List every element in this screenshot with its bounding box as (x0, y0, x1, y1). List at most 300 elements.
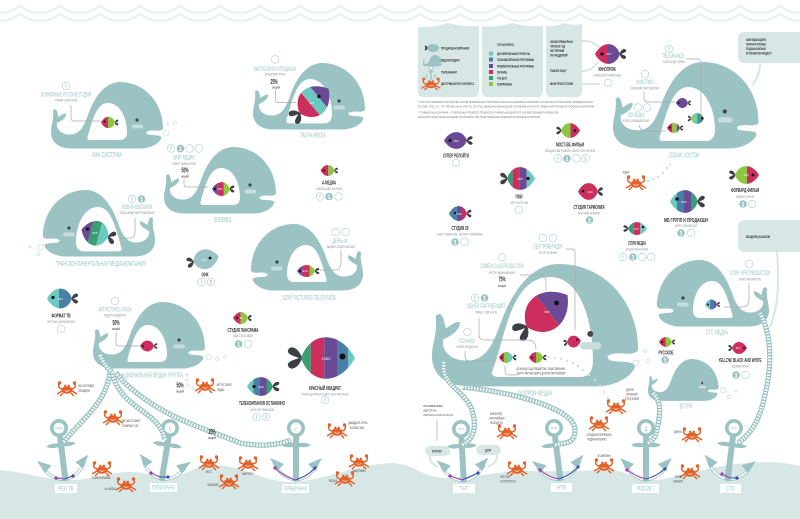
label: Art Pictures Vision: 50% (112, 320, 120, 327)
label: Новая компания (120, 205, 155, 215)
anchor: Первый канал (270, 421, 322, 493)
fish: Гармония (578, 183, 603, 200)
label: Супер Релоити: СУПЕР РЕЛОЙТИ (443, 152, 469, 160)
whale: АФК Система (51, 82, 163, 148)
dotted trail: Zodiak to crab (647, 163, 671, 182)
label: Comedy Club Production: АРТУР ДЖАНИБЕКЯН (489, 270, 515, 275)
fish: Газпром large (512, 292, 568, 341)
fish: Форвард-Фильм (729, 166, 759, 184)
label: МБ Групп: МАРГО ХРАМОВСКАЯ (675, 223, 697, 228)
rope: НМГ to Пен ТВ (63, 372, 110, 443)
label: Студия 29: ОЛЕГ ИВАНОВ, НЕЛЛИ КЛЕЙМАН (437, 232, 483, 236)
panel: fish metrics legend: ЧАСОВ В ГОД (550, 44, 565, 48)
fish: Красный квадрат (288, 337, 355, 379)
crab captions, right page: ДЖЕРОЧ (674, 430, 682, 434)
fish: Панорама (233, 312, 252, 324)
label: Студия 29 (437, 226, 483, 236)
anchor: НТВ: НТВ (557, 486, 566, 492)
fish: ОНК (186, 249, 218, 270)
callout connector (752, 63, 760, 85)
label: Формат ТВ: СВЕТЛАНА ШАРИКОВСКАЯ (47, 319, 75, 324)
label: Центр Партнершип: ПАВЕЛ СТЕПАНОВ (475, 310, 497, 314)
crab captions, right page: ВОРТАНЕРСКИЙ (626, 392, 638, 396)
source note (423, 404, 454, 417)
label: Story First Production: ВЯЧЕСЛАВ МУРУГОВ (739, 276, 761, 282)
label: Yellow, Black and White: ЭДУАРД ИЛОЯН (732, 364, 749, 368)
label: Tellurance (662, 54, 685, 64)
label: ПКИ (510, 194, 528, 205)
label: FTO Нанко: ЮРИЙ СЕРДЮКОВ (456, 344, 478, 349)
label: Вайт Медиа: ТИМУР ВАЙНШТЕЙН (172, 161, 196, 166)
label: Возможные русские студии (41, 92, 91, 102)
label: Мир реалити (254, 67, 296, 90)
stake labels and crab captions, left page: 25% (208, 429, 216, 436)
fish: МБ Групп (670, 190, 705, 213)
fish: Студия 29 (449, 206, 471, 221)
small circular badges (57, 45, 756, 421)
label: Мир реалити: 25% (270, 79, 278, 86)
crab captions, right page: ТОЛЕ (674, 475, 682, 479)
legend type labels: ТОК-ШОУ (497, 76, 507, 80)
badge numerals: 1 (140, 198, 144, 204)
legend labels: ДИСТРИБЬЮТОР КОНТЕНТА (441, 82, 474, 86)
footnotes: ИНАЯ ДОЛЯ ТАКЖЕ МЕЖДУНАРОДНЫЕ ИНСТРУМЕНТЫ ИЛИ ПРЕДСТАВЛЕННЫЕ ПРОДЮСЕРОМ ПРОДАКШН-КОМПАНИИ (418, 115, 540, 119)
fish: ОНК: 140 (201, 258, 207, 262)
whale: Национальная Медиа Группа (93, 302, 205, 368)
rope: ВГТРК to Россия 1 (648, 393, 660, 443)
label: Студия Панорама (228, 328, 259, 338)
badge numerals: 5 (265, 415, 268, 421)
badge numerals: 1 (565, 157, 569, 163)
badge numerals: f (256, 415, 258, 421)
label: Красный квадрат (302, 384, 349, 396)
label: МБ Групп: МБ ГРУПП И ПРОДАКШН (664, 218, 708, 224)
fish: Супер Релоити: 280 (453, 139, 459, 143)
crab captions, right page: ЗОДИАК (622, 170, 630, 174)
callout: question box: ПРОДАКШН-КОМПАНИИ, (746, 47, 766, 51)
rope: НМГ to Пятый канал (112, 372, 165, 440)
badge numerals: 1 (631, 256, 635, 262)
fish: Газпром large: 860 (544, 310, 550, 314)
fish: Sony (297, 265, 319, 277)
crab captions, right page: НЕТУОРКСОН (500, 480, 516, 484)
anchor: Пятый канал: ПЯТЫЙ КАНАЛ (152, 484, 175, 492)
fish: Story First (705, 300, 720, 310)
label: Центр Партнершип (467, 304, 505, 314)
label: Zodiak Vostok: ZODIAK VOSTOK (668, 152, 700, 160)
label: Art Pictures Vision: ART PICTURES VISION (98, 308, 132, 314)
label: День-М (327, 239, 355, 249)
stake labels and crab captions, left page: ART PICTURES (216, 383, 232, 387)
badge numerals: 1 (483, 296, 487, 302)
label: Формат ТВ (47, 314, 75, 324)
stake labels and crab captions, left page: ФЕСТ (206, 470, 212, 474)
label: Стори Медиа (626, 241, 648, 252)
callout: channel owner (738, 220, 800, 252)
pill: доля: ДОЛЯ (485, 448, 491, 452)
label: Story First Production (730, 271, 770, 282)
anchor: Пятый канал (136, 417, 197, 492)
stake labels and crab captions, left page: МЕДИА (218, 388, 225, 392)
badge numerals: f (474, 296, 476, 302)
fish: Zodiak purple (676, 98, 691, 108)
badge numerals: 1 (679, 232, 683, 238)
anchor: Россия 1 (620, 421, 672, 493)
anchor: СТС (702, 418, 761, 493)
stake labels and crab captions, left page: ЗАЩИТНИКИ (352, 469, 366, 473)
label: Вайт Медиа (172, 154, 196, 178)
legend type labels (497, 52, 534, 86)
fish: Кинопром: 297 (606, 52, 612, 56)
pill: доля (476, 445, 501, 455)
icon: anchor (425, 66, 437, 80)
label: Годот премьер-медиа: АРТУР ЗЕЛЕНИН (539, 250, 557, 255)
text: СТОРИ МЕДИА (628, 241, 646, 247)
label: Красный квадрат: КРАСНЫЙ КВАДРАТ (309, 384, 341, 392)
fish: Центр Партнершип (529, 352, 546, 363)
bubbles (29, 121, 737, 399)
crab captions, right page: ХОЛОДОМ ИНТЕРНЕЙШНЛ (586, 433, 612, 437)
label: А-Медиа: АЛЕКСАНДР АКОПОВ (316, 186, 342, 191)
crab captions, right page: МЕДИА НЕТВОРКС (588, 438, 607, 442)
badge numerals: 1 (588, 218, 592, 224)
rope: НМГ tail knot (100, 355, 112, 372)
fish: Останкино: 390 (258, 385, 264, 389)
icon: media holding (423, 55, 442, 66)
legend type labels: СЕРИАЛЫ (497, 70, 507, 74)
label: Стори Медиа: ВЛАДИСЛАВ РЫЖОВ (626, 246, 648, 252)
stake labels and crab captions, left page: ДВАДЦАТЬ ПЯТЬ (348, 421, 368, 425)
label: Мистфо: МИСТФО (636, 80, 654, 86)
label: День-М: ВАДИМ СОКОЛОВСКИЙ (327, 244, 355, 249)
icon: crab distributor (422, 77, 440, 90)
fish: Студия 29: 190 (456, 212, 462, 216)
crab captions, right page: (ГРУЗ) НОВОЕ (625, 397, 639, 401)
panel: fish metrics legend (546, 23, 582, 97)
dotted trail: Газпром to crab (548, 356, 609, 399)
label: ПКИ: ОЛЕГ КАПУСТИН (510, 200, 528, 205)
fish: А-Медиа (320, 165, 338, 176)
label: note inside Газпром whale: ЦЕНТР ПАРТНЕРШИП И ДОЛГИЕ ПЕРТНЕРШИП (516, 372, 566, 376)
stake labels and crab captions, left page: PLANETA RUSSIA (92, 476, 111, 480)
label: Мистфо (631, 80, 659, 90)
stake labels and crab captions, left page: акций (176, 390, 184, 394)
footnotes: ** ГЛАВНЫЕ ЛИЦА КОМПАНИИ — ГЕНЕРАЛЬНЫЙ ПРОДЮСЕР, ПРОДЮСЕР И ГЕНЕРАЛЬНЫЙ ДИРЕКТОР, ХУДОЖЕСТВЕННЫЙ РУКОВОДИТЕЛЬ (418, 110, 559, 114)
label: Art Pictures Vision (98, 308, 132, 331)
label: Art Pictures Vision: акций (112, 327, 120, 331)
label: ВГТРК: ВГТРК (680, 404, 693, 410)
callout: question box (738, 32, 800, 63)
anchor: Пен ТВ (32, 418, 91, 493)
fish: МБ Групп: 540 (681, 200, 687, 204)
whale: СТС Медиа (657, 260, 769, 326)
anchor: ТНТ: ТНТ (460, 486, 469, 492)
label: Зох Медиа: ЗОХ МЕДИА (628, 113, 644, 119)
label: А-Медиа (316, 180, 342, 191)
footnotes: * ПРИ СОСТАВЛЕНИИ КОЛИЧЕСТВО ЧАСОВ ПРЕМЬЕРНЫХ ПРОГРАММ СОГЛАСНО ДАННЫМ КОМПАНИЙ И ОТКРЫТЫХ ИСТОЧНИКОВ, ПЕРВЫЕ КАНАЛЫ (418, 100, 594, 104)
anchor: НТВ: НТВ (551, 426, 558, 430)
footnotes: РОССИИ, НТВ, СТС, ТНТ, ПЯТЫЙ КАНАЛ, РЕН ТВ, 2014 ГОД. МЕЖДУНАРОДНЫЕ ДОЛИ ОСТАНОВКИ КОНТЕНТА, МЕДИА КОРПОРАЦИИ И ПРОДАКШН-КОМПАНИИ (418, 104, 594, 108)
label: Возможные русские студии: ВОЗМОЖНЫЕ РУССКИЕ СТУДИИ (41, 92, 91, 98)
fish: Стори Медиа: 170 (633, 227, 639, 231)
label: Форвард-Фильм: ФОРВАРД-ФИЛЬМ (731, 188, 759, 194)
badge numerals: f (324, 398, 326, 404)
badge numerals: 5 (210, 280, 213, 286)
anchor: СТС: СТС (731, 426, 738, 430)
anchor: СТС: СТС (726, 486, 735, 492)
whale: ВГТРК (648, 359, 719, 401)
label: Вайт Медиа: акций (181, 174, 189, 178)
badge numerals: 5 (584, 156, 587, 162)
crab captions, right page: ТВ БОДУЭН (490, 421, 503, 425)
fish: Zodiak red (667, 123, 683, 133)
legend swatches (489, 52, 493, 86)
fish: Talpa: 671 (309, 101, 315, 105)
fish: Панорама: 75 (239, 316, 243, 320)
panel: content types legend (482, 23, 543, 97)
label: МБ Групп (664, 218, 708, 228)
text: ГОДОТ ПРЕМЬЕР-МЕДИА (534, 244, 562, 250)
label: Comedy Club Production (480, 264, 524, 288)
label: Русское: РУССКОЕ (658, 350, 674, 356)
footnotes (418, 100, 594, 119)
label: Мир реалити: ВЛАДИМИР ФТИН (265, 72, 285, 76)
label: Art Pictures Vision: ФЕДОР БОНДАРЧУК (104, 312, 126, 318)
fish: АФК (101, 117, 118, 128)
stake labels and crab captions, left page: ВАРЯГО (242, 472, 254, 476)
label: Студия Гармония: ВЕРОНИКА ЗЕЛЕНАЯ (578, 210, 600, 216)
callout: question box: КОТОРЫМИ ОН ВЛАДЕЕТ? (746, 52, 772, 56)
fish: Красный квадрат: 1050 (322, 356, 331, 361)
fish: ФТО Нанко (496, 350, 516, 364)
label: Зох Медиа (623, 113, 649, 123)
legend type labels: ДОКУМЕНТАЛЬНЫЕ ПРОЕКТЫ (497, 52, 530, 56)
panel: fish metrics legend: ОБЪЕМ ПРЕМЬЕРНЫХ (550, 40, 573, 44)
panel: legend companies (418, 23, 479, 97)
label: ТМК: ТРАНСКОНТИНЕНТАЛЬНАЯ МЕДИАКОМПАНИЯ (56, 261, 146, 268)
callout: question box: ПУБЛИЧНО РАСПОЛОЖЕНЫ (746, 42, 766, 46)
badge numerals: f (131, 197, 133, 203)
fish: Yellow, Black and White (728, 342, 747, 354)
label: Зох Медиа: ЕЛЕНА ЛЮБАШЕВСКАЯ (623, 118, 649, 123)
label: Национальная Медиа Группа: НАЦИОНАЛЬНАЯ МЕДИА ГРУППА (119, 372, 183, 380)
badge numerals: f (668, 47, 670, 53)
label: Talpa Media: TALPA MEDIA (300, 132, 326, 140)
stake labels and crab captions, left page (78, 382, 368, 491)
label: Comedy Club Production: COMEDY CLUB PRODUCTION (480, 264, 524, 270)
label: Кинопром: КИНОПРОМ (598, 67, 616, 73)
label: СТС Медиа: СТС МЕДИА (706, 330, 728, 336)
panel: fish metrics legend: ЭКСТЕРНИВ (550, 49, 564, 53)
crab captions, right page (490, 170, 683, 484)
label: Студия 29: СТУДИЯ 29 (452, 226, 468, 232)
label: note inside Газпром whale: ДО КОНЦА ГОДА ПРЕДМЕТОМ, ОБЩЕСТВЕННЫМ, (516, 367, 566, 371)
pill connectors (430, 455, 497, 467)
label: Вайт Медиа: 50% (182, 168, 189, 174)
text: МИР РЕАЛИТИ И ПРОДАКШН (254, 67, 296, 73)
panel: fish metrics legend: ГЛАВНОЕ ЛИЦО** (550, 69, 567, 73)
badge numerals: f (319, 194, 321, 200)
rope: НМГ to Первый канал (115, 372, 291, 445)
fish: Yellow, Black and White: 110 (736, 346, 741, 350)
badge numerals: 1 (741, 202, 745, 208)
fish: Endemol: 452 (217, 187, 223, 191)
label: Кинопром (593, 67, 621, 78)
label: Новая компания: НОВАЯ КОМПАНИЯ (122, 205, 152, 211)
fish: Sony: 340 (302, 269, 308, 273)
legend type labels: РАЗВЛЕКАТЕЛЬНЫЕ ПРОГРАММЫ (497, 64, 534, 68)
badge numerals: f (557, 156, 559, 162)
label: Вайт Медиа: ВАЙТ МЕДИА (174, 154, 194, 162)
label: Газпром-Медиа: ГАЗПРОМ-МЕДИА (518, 390, 552, 398)
anchor: Пен ТВ: РЕН ТВ (58, 486, 74, 492)
legend connector lines (582, 41, 600, 84)
anchor: Россия 1: РОССИЯ 1 (637, 486, 654, 492)
fish: Супер Релоити (444, 132, 473, 149)
label: ПКИ: ПКИ (516, 194, 523, 200)
label: Студия Панорама: СТУДИЯ ПАНОРАМА (228, 328, 259, 334)
crab captions, right page: ПОРТ ВЛК (500, 475, 510, 479)
label: FTO Нанко (456, 339, 478, 349)
label: Форвард-Фильм: АНДРЕЙ ЧЕРНЯК (736, 194, 754, 199)
stake labels and crab captions, left page: ТЕЛЕВИДЕНИЕ (78, 389, 90, 393)
label: День-М: ДЕНЬ-М (332, 239, 348, 245)
label: Годот премьер-медиа (534, 244, 562, 255)
legend labels (441, 46, 474, 86)
sea floor wave (0, 462, 800, 519)
label: Студия Гармония (574, 205, 605, 216)
source note: ПЕРИОД 01.01.2013-31.12.2013 (423, 413, 454, 417)
badge numerals: 1 (734, 374, 738, 380)
label: Comedy Club Production: акций (498, 284, 506, 288)
whale: Endemol (164, 147, 276, 214)
badge numerals: 1 (179, 147, 183, 153)
label: Endemol: ENDEMOL (214, 217, 232, 224)
badge numerals: f (170, 146, 172, 152)
fish: Русское (659, 337, 675, 347)
stake labels and crab captions, left page: акций (208, 436, 216, 440)
anchor: ТНТ: ТНТ (458, 428, 464, 432)
label: Comedy Club Production: 75% (498, 276, 506, 284)
label: Yellow, Black and White (718, 358, 762, 368)
fish: ПКИ: 400 (517, 177, 523, 181)
label: Новая компания: АЛЕКСАНДР МИТРОШЕНКОВ (120, 210, 155, 215)
label: Мост-Ве-Фильм: МОСТ-ВЕ-ФИЛЬМ (556, 142, 584, 148)
badge numerals: 1 (237, 342, 241, 348)
callout: question box: КАКИЕ МЕДИАХОЛДИНГИ (746, 38, 766, 42)
legend type labels: ПОЗНАВАТЕЛЬНЫЕ ПРОГРАММЫ (497, 58, 534, 62)
fish: Гармония: 120 (587, 190, 593, 194)
label: Останкино (239, 401, 285, 412)
label: Мост-Ве-Фильм: ВЛАДИСЛАВ РЫЖОВ, ВАЛЕНТИН ОРЛОВ (545, 148, 595, 153)
fish: НМГ (140, 340, 157, 352)
stake labels and crab captions, left page: 50% (176, 382, 184, 390)
label: Yellow, Black and White: YELLOW, BLACK AND WHITE (718, 358, 762, 364)
label: Кинопром: АЛЕКСЕЙ ПИМЕНОВ (593, 72, 621, 78)
label: Мистфо: ВИТАЛИЙ ПЕРСОВСКИЙ (631, 86, 659, 90)
crab captions, right page: В СИМФОНИ (598, 454, 611, 458)
label: Tellurance: TELLURANCE (662, 54, 684, 60)
fish: Газпром small red (563, 336, 581, 348)
fish: Форвард-Фильм: 230 (743, 173, 749, 177)
label: ОНК: ОНК (202, 272, 209, 278)
fish: Формат ТВ (47, 288, 78, 308)
whale: Talpa Media (253, 63, 365, 130)
panel: content types legend: ТИП КОНТЕНТА (497, 43, 514, 47)
label: Красный квадрат: РОМАН ДОРФМАН И ОЛЕГ КОНСТАНТИНОВ (302, 392, 349, 396)
pill: рейтинг: РЕЙТИНГ (432, 450, 442, 454)
crab captions, right page: ИНТЕРНЕЙШНЛ (490, 416, 504, 420)
legend type labels: ТЕЛЕФИЛЬМЫ (497, 82, 512, 86)
label: А-Медиа: А-МЕДИА (322, 180, 336, 186)
stake labels and crab captions, left page: ALL MEDIA (104, 487, 116, 491)
label: Возможные русские студии: ЮРИЙ ЗОЛОТОВ (55, 98, 77, 102)
label: Sony Pictures Television: SONY PICTURES TELEVISION (282, 295, 336, 302)
label: Останкино: ТЕЛЕКОМПАНИЯ ОСТАНКИНО (239, 401, 285, 407)
icon: production company (425, 44, 439, 52)
anchor ring marks: 1 (645, 427, 648, 433)
badge numerals (65, 47, 745, 421)
whale: Sony Pictures Television (251, 224, 363, 290)
fish: Мост-Ве-Фильм (556, 123, 580, 138)
fish: Транскон: 925 (92, 231, 98, 235)
stake labels and crab captions, left page: ВОЛЬФ (329, 479, 337, 483)
whale: Трансконтинентальная медиакомпания (43, 190, 155, 256)
sea surface waves at top (0, 6, 800, 21)
legend labels: ТЕЛЕКАНАЛ (441, 70, 457, 74)
fish: Транскон (82, 221, 116, 246)
label: АФК Система: АФК СИСТЕМА (92, 152, 122, 159)
anchor ring marks: 5 (169, 427, 172, 433)
anchor ring marks (169, 427, 648, 433)
label: Центр Партнершип: ЦЕНТР ПАРТНЕРШИП (467, 304, 505, 310)
callout: channel owner: ВЛАДЕЛЕЦ КАНАЛОВ (746, 235, 770, 239)
fish: Zodiak striped (688, 113, 704, 124)
whale: Газпром-Медиа (432, 264, 638, 386)
label: Останкино: АЛЕКСЕЙ ПИМАНОВ (250, 407, 274, 412)
fish: Стори Медиа (623, 222, 647, 235)
badge numerals: f (65, 84, 67, 90)
fish: Останкино (247, 377, 279, 396)
stake labels and crab captions, left page: ВАСИЛЬЕВ (208, 483, 219, 487)
whale: Zodiak Vostok (613, 62, 759, 148)
rope: СТС Медиа to СТС (738, 313, 770, 443)
crab captions, right page: ЮЖНАЯ (674, 480, 683, 484)
anchor: Пен ТВ: РЕН (56, 426, 63, 430)
stake labels and crab captions, left page: НАС НАСТОЯЩЕЕ (78, 384, 94, 388)
source note: ИСТОЧНИК РЕЙТИНГОВ: TNS, (423, 404, 443, 408)
fish: Формат ТВ: 267 (58, 297, 63, 301)
badge numerals: 1 (327, 195, 331, 201)
anchor: Первый канал: ПЕРВЫЙ КАНАЛ (284, 484, 307, 492)
legend labels: ПРОДАКШН-КОМПАНИЯ (441, 46, 469, 50)
rope: Газпром to ТНТ (444, 362, 474, 445)
legend labels: МЕДИАХОЛДИНГ (441, 58, 460, 62)
callout connector long (770, 252, 778, 327)
rope: Газпром to НТВ (462, 387, 575, 445)
label: Студия Панорама: ИДА СТАНОВАЯ (233, 333, 253, 338)
stake labels and crab captions, left page: COMPANY CIS (122, 424, 138, 428)
anchor: НТВ (527, 418, 586, 492)
fish: Кинопром (595, 44, 626, 64)
connector lines (71, 59, 749, 441)
badge numerals: f (622, 255, 624, 261)
source note: АУДИТОРИЯ 4+ (423, 408, 437, 412)
crab captions, right page: MONDO ERSE (490, 412, 502, 416)
fish: Talpa (288, 86, 330, 124)
label: Мост-Ве-Фильм (545, 142, 595, 153)
label: Форвард-Фильм (731, 188, 759, 199)
